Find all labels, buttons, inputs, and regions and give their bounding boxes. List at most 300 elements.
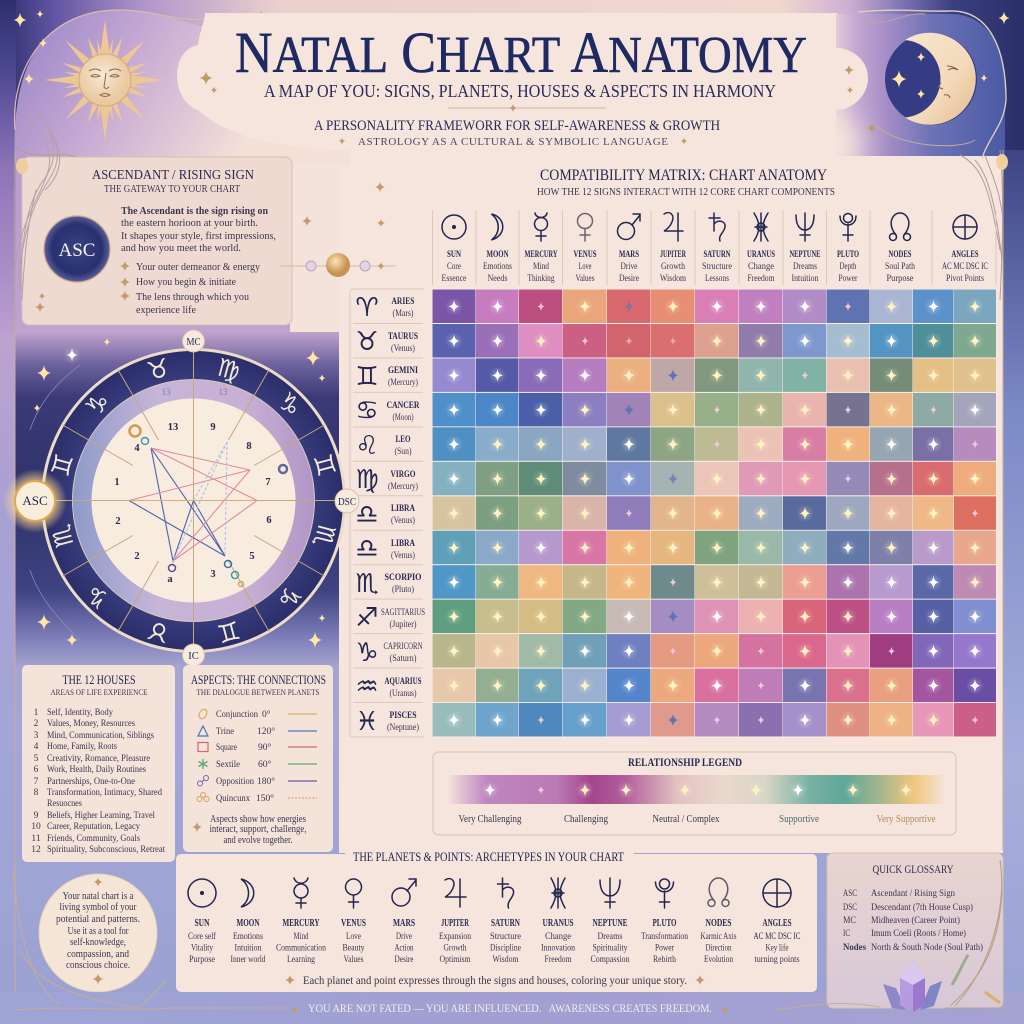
IC marker: IC	[188, 651, 199, 662]
ascendant bullet list: experience life	[136, 305, 196, 316]
houses list: Friends, Community, Goals	[47, 834, 140, 844]
zodiac glyphs: ♊︎	[308, 451, 341, 480]
sign names: (Venus)	[391, 550, 415, 561]
houses list: 8	[34, 788, 39, 798]
house numbers	[114, 422, 272, 585]
aspect: conjunction	[197, 708, 317, 720]
aspects note: Aspects show how energies	[210, 814, 306, 825]
glossary entries: MC	[843, 916, 856, 926]
glossary entries: North & South Node (Soul Path)	[871, 942, 983, 953]
matrix row: Libra second	[432, 531, 996, 564]
planet: saturn: Discipline	[490, 942, 521, 952]
house numbers: 13	[168, 422, 178, 433]
sign glyphs: ♎︎	[355, 534, 379, 564]
house numbers: 8	[246, 441, 252, 452]
aspect lines	[129, 442, 257, 561]
aspect: square: 90°	[258, 742, 272, 753]
planet: nodes: Direction	[706, 942, 732, 952]
column: neptune: Intuition	[792, 273, 819, 283]
ascendant bullet list: Your outer demeanor & energy	[136, 262, 261, 273]
aspect: opposition	[198, 776, 317, 787]
ascendant description: It shapes your style, first impressions,	[121, 231, 276, 242]
column: sun: Essence	[442, 273, 466, 283]
houses list: 6	[34, 765, 39, 775]
panel: aspects	[183, 665, 333, 852]
column: saturn: Structure	[702, 261, 732, 271]
houses list: Resuocnes	[47, 799, 82, 809]
house numbers: 9	[210, 422, 216, 433]
sign names: TAURUS	[388, 332, 418, 342]
matrix row: Pisces	[432, 703, 996, 736]
aspect: trine	[198, 726, 317, 737]
sign glyphs: ♉︎	[355, 327, 379, 357]
planet: venus: Love	[346, 931, 361, 941]
quote medallion: self-knowledge,	[70, 937, 126, 948]
planet: uranus: URANUS	[542, 918, 574, 929]
quote medallion	[39, 874, 157, 992]
planet: moon: Intuition	[234, 942, 262, 952]
ascendant description: The Ascendant is the sign rising on	[121, 206, 268, 217]
column: nodes: Purpose	[886, 273, 914, 283]
sign names: ARIES	[392, 297, 414, 307]
bottom-left vine	[13, 870, 880, 1010]
sign names: (Mercury)	[388, 377, 418, 388]
sun cartouche	[14, 10, 350, 165]
legend labels: Challenging	[564, 814, 608, 825]
house numbers: 3	[210, 569, 216, 580]
aspect: sextile: 60°	[258, 759, 272, 770]
ascendant heading: ASCENDANT / RISING SIGN	[92, 168, 254, 183]
zodiac glyphs: ♑︎	[79, 386, 116, 423]
planet: pluto	[641, 879, 688, 964]
sign names: (Neptune)	[387, 722, 419, 733]
sign names: (Saturn)	[390, 653, 416, 664]
column: neptune: Dreams	[793, 261, 817, 271]
planet: pluto: Transformation	[641, 931, 688, 941]
sign names: (Mercury)	[388, 481, 418, 492]
panel: ascendant	[22, 157, 292, 325]
planet: neptune	[590, 878, 630, 964]
matrix row: Aquarius	[432, 669, 996, 702]
column: neptune: NEPTUNE	[790, 250, 820, 260]
planet: venus: VENUS	[341, 918, 366, 929]
houses list: Career, Reputation, Legacy	[47, 822, 140, 832]
zodiac glyphs: ♍︎	[214, 353, 243, 386]
relationship legend	[433, 752, 956, 835]
matrix column headers	[432, 210, 996, 285]
planet: angles: turning points	[754, 954, 800, 964]
house numbers: 7	[265, 477, 271, 488]
planet: jupiter: Growth	[444, 942, 467, 952]
icon: amethyst crystal	[883, 960, 942, 1012]
wheel spokes	[55, 349, 342, 652]
column: nodes: Soul Path	[885, 261, 915, 271]
column: jupiter: Growth	[661, 261, 685, 271]
zodiac glyphs: ♏︎	[308, 521, 341, 550]
sign names: LEO	[396, 435, 410, 445]
quote medallion: potential and patterns.	[56, 914, 140, 925]
planet: jupiter	[439, 879, 471, 964]
legend gradient bar	[447, 775, 945, 804]
planet: uranus: Change	[545, 931, 571, 941]
sign names: (Pluto)	[392, 584, 414, 595]
aspect: sextile: Sextile	[216, 760, 240, 770]
column: mercury: MERCURY	[524, 250, 558, 260]
aspect: opposition: Opposition	[216, 777, 254, 787]
column: mars	[618, 214, 640, 283]
footer motto: YOU ARE NOT FATED — YOU ARE INFLUENCED. AWARENESS CREATES FREEDOM.	[308, 1001, 712, 1015]
column: jupiter: JUPITER	[660, 250, 686, 260]
sign glyphs: ♏︎	[355, 569, 379, 599]
column: saturn: Lessons	[705, 273, 729, 283]
quote medallion: Your natal chart is a	[62, 891, 134, 902]
column: mars: Drive	[620, 261, 638, 271]
panel: twelve houses	[22, 665, 175, 862]
ascendant bullet list: How you begin & initiate	[136, 277, 236, 288]
aspect: quincunx: 150°	[256, 793, 274, 804]
planet: mercury: Mind	[294, 931, 309, 941]
planet: pluto: Rebirth	[653, 954, 676, 964]
house numbers: 4	[134, 443, 140, 454]
column: venus: Love	[578, 261, 592, 271]
glossary entries: Nodes	[843, 943, 866, 953]
aspect: conjunction: 0°	[262, 709, 271, 720]
sign glyphs: ♊︎	[355, 362, 379, 392]
quote medallion: Use it as a tool for	[68, 926, 129, 937]
planet: sun: Purpose	[189, 954, 215, 964]
zodiac glyphs: ♊︎	[46, 451, 79, 480]
natal wheel	[3, 330, 359, 666]
matrix row: Scorpio	[432, 565, 996, 599]
ring degree marks: 13	[162, 387, 171, 397]
glossary entries: DSC	[843, 903, 857, 913]
houses list: Transformation, Intimacy, Shared	[47, 787, 162, 798]
matrix row: Leo	[432, 427, 996, 461]
sign names: (Jupiter)	[390, 619, 416, 630]
planet: pluto: PLUTO	[652, 918, 677, 929]
aspects note	[192, 814, 306, 846]
sign names: SAGITTARIUS	[381, 608, 425, 618]
planet: angles: AC MC DSC IC	[754, 931, 800, 941]
planet: neptune: Compassion	[590, 954, 630, 964]
houses list: 2	[34, 719, 39, 729]
matrix row: Libra	[432, 496, 996, 530]
wheel background stars	[30, 338, 326, 648]
houses list: 1	[34, 708, 39, 718]
planet: jupiter: Optimism	[440, 954, 470, 964]
planet: moon: Inner world	[230, 954, 266, 964]
planet: mercury: MERCURY	[282, 918, 320, 929]
planet: angles: Key life	[766, 942, 788, 952]
legend labels: Very Supportive	[876, 814, 936, 825]
DSC marker: DSC	[338, 497, 356, 508]
column: venus	[574, 214, 596, 283]
bottom-right vine	[945, 860, 1002, 1008]
column: nodes	[885, 213, 915, 283]
matrix row: Cancer	[432, 393, 996, 426]
glossary entries: Imum Coeli (Roots / Home)	[871, 928, 966, 939]
planet: moon: Emotions	[233, 931, 263, 941]
column: angles: AC MC DSC IC	[942, 261, 988, 271]
tagline: A PERSONALITY FRAMEWORR FOR SELF-AWARENESS & GROWTH	[314, 118, 720, 134]
planet: mars	[392, 879, 416, 964]
planet: sun	[188, 879, 216, 964]
planet: sun: SUN	[194, 918, 210, 929]
planet: nodes: NODES	[706, 918, 732, 929]
zodiac glyphs: ♑︎	[79, 578, 116, 615]
houses list	[31, 707, 165, 855]
ascendant description: and how you meet the world.	[121, 243, 241, 254]
planet: neptune: Spirituality	[592, 942, 628, 952]
sign glyphs: ♐︎	[355, 603, 379, 633]
panel: planets and points	[176, 845, 817, 992]
sign names: (Venus)	[391, 515, 415, 526]
planet: sun: Core self	[188, 931, 216, 941]
houses list: Values, Money, Resources	[47, 719, 135, 729]
zodiac glyphs: ♉︎	[144, 615, 173, 648]
aspect: square	[198, 742, 317, 753]
header panel	[177, 13, 838, 150]
legend labels	[458, 814, 936, 825]
cultural note: ASTROLOGY AS A CULTURAL & SYMBOLIC LANGUAGE	[358, 136, 668, 148]
sign names: LIBRA	[391, 504, 415, 514]
sign names: LIBRA	[391, 539, 415, 549]
house numbers: a	[167, 574, 173, 585]
house numbers: 1	[114, 477, 120, 488]
house numbers: 6	[266, 515, 272, 526]
subtitle: A MAP OF YOU: SIGNS, PLANETS, HOUSES & ASPECTS IN HARMONY	[264, 81, 776, 101]
planet: neptune: NEPTUNE	[592, 918, 628, 929]
ascendant bullet list	[120, 261, 261, 316]
sign names: (Moon)	[392, 412, 414, 423]
sign names	[381, 297, 425, 733]
column: moon: Emotions	[483, 261, 512, 271]
title: NATAL CHART ANATOMY	[235, 20, 807, 85]
zodiac glyphs: ♉︎	[144, 353, 173, 386]
planet: jupiter: JUPITER	[441, 918, 470, 929]
sign glyphs: ♎︎	[355, 500, 379, 530]
planet: angles	[754, 879, 800, 964]
column: mars: Desire	[619, 273, 639, 283]
aspects heading: ASPECTS: THE CONNECTIONS	[191, 673, 326, 687]
column: sun: Core	[447, 261, 461, 271]
moon cartouche	[738, 10, 1010, 187]
houses list: Partnerships, One-to-One	[47, 777, 135, 787]
sign names: SCORPIO	[384, 573, 422, 583]
column: sun: SUN	[447, 250, 461, 260]
sign glyphs: ♋︎	[355, 396, 379, 426]
matrix row: Taurus	[432, 324, 996, 358]
quote medallion: conscious choice.	[66, 960, 130, 971]
planet: moon	[230, 879, 266, 964]
column: saturn: SATURN	[704, 250, 731, 260]
column: moon: Needs	[488, 273, 508, 283]
planet: jupiter: Expansion	[439, 931, 471, 941]
column: sun	[442, 215, 466, 283]
column: uranus: URANUS	[747, 250, 775, 260]
houses list: Creativity, Romance, Pleasure	[47, 754, 150, 764]
IC marker	[182, 644, 204, 666]
column: angles: ANGLES	[952, 250, 978, 260]
sign glyphs: ♒︎	[355, 672, 379, 702]
sign names: (Sun)	[394, 446, 412, 457]
glossary entries: Midheaven (Career Point)	[871, 915, 960, 926]
planet: uranus	[541, 878, 575, 964]
planet: mercury: Communication	[276, 942, 326, 952]
glossary entries: IC	[843, 929, 850, 939]
icon: ASC badge	[44, 216, 110, 282]
aspect: trine: 120°	[257, 726, 275, 737]
aspect: quincunx	[197, 792, 317, 804]
sign names: (Mars)	[392, 308, 414, 319]
quote medallion: compassion, and	[67, 949, 130, 960]
sign names: CAPRICORN	[384, 642, 423, 652]
legend labels: Supportive	[779, 814, 820, 825]
column: jupiter	[660, 213, 686, 283]
sign names: GEMINI	[388, 366, 418, 376]
house numbers: 5	[249, 551, 255, 562]
houses list: 10	[31, 822, 41, 832]
glossary entries: Ascendant / Rising Sign	[871, 889, 955, 899]
icon: smiling sun	[45, 20, 165, 140]
zodiac glyphs: ♊︎	[214, 615, 243, 648]
aspect: sextile	[198, 759, 317, 770]
footer band	[0, 992, 1024, 1024]
column: neptune	[790, 213, 820, 283]
house numbers: 2	[134, 551, 140, 562]
panel: quick glossary	[827, 853, 1003, 1008]
houses list: 3	[34, 731, 39, 741]
icon: ASC badge: ASC	[59, 240, 95, 261]
zodiac glyphs: ♑︎	[271, 386, 308, 423]
planet: sun: Vitality	[191, 942, 213, 952]
ring degree marks: 13	[218, 387, 228, 397]
glossary title: QUICK GLOSSARY	[872, 862, 954, 876]
ascendant bullet list: The lens through which you	[136, 292, 250, 303]
glossary entries: ASC	[843, 889, 857, 899]
column: pluto: Depth	[840, 261, 857, 271]
houses list: Mind, Communication, Siblings	[47, 731, 154, 741]
compatibility matrix heading: COMPATIBILITY MATRIX: CHART ANATOMY	[540, 167, 827, 184]
planet: mars: Action	[394, 942, 414, 952]
column: moon	[483, 214, 512, 283]
matrix sign labels	[350, 289, 425, 737]
matrix row: Virgo	[432, 462, 996, 495]
column: angles: Pivot Points	[946, 273, 984, 283]
column: pluto: PLUTO	[837, 250, 859, 260]
house numbers: 2	[115, 516, 121, 527]
sign glyphs: ♓︎	[355, 707, 379, 737]
houses list: 11	[31, 834, 41, 844]
matrix row: Capricorn	[432, 634, 996, 668]
compatibility matrix subheading: HOW THE 12 SIGNS INTERACT WITH 12 CORE CHART COMPONENTS	[537, 186, 835, 198]
planet: neptune: Dreams	[598, 931, 623, 941]
aspect: square: Square	[216, 743, 237, 753]
ASC marker: ASC	[22, 493, 48, 508]
MC marker	[182, 330, 204, 352]
MC marker: MC	[186, 337, 200, 348]
planet: saturn	[490, 878, 521, 964]
column: angles	[942, 215, 988, 283]
zodiac band	[42, 350, 344, 652]
sign glyphs: ♍︎	[355, 465, 379, 495]
houses list: 4	[34, 742, 39, 752]
planet: nodes: Evolution	[704, 954, 733, 964]
houses list: Home, Family, Roots	[47, 742, 117, 752]
column: mercury: Thinking	[528, 273, 555, 283]
column: mercury	[524, 213, 558, 283]
aspect: conjunction: Conjunction	[216, 710, 258, 720]
column: mars: MARS	[619, 250, 639, 260]
planet: uranus: Innovation	[541, 942, 575, 952]
sign names: AQUARIUS	[384, 677, 422, 687]
planets heading: THE PLANETS & POINTS: ARCHETYPES IN YOUR CHART	[353, 849, 624, 864]
sign names: (Uranus)	[390, 688, 416, 699]
houses list: Beliefs, Higher Learning, Travel	[47, 810, 155, 821]
column: uranus: Freedom	[748, 273, 774, 283]
houses subheading: AREAS OF LIFE EXPERIENCE	[50, 687, 148, 697]
matrix row: Sagittarius	[432, 600, 996, 633]
houses list: Spirituality, Subconscious, Retreat	[47, 845, 165, 855]
zodiac glyphs	[46, 353, 341, 648]
house ring	[72, 380, 314, 622]
ASC marker	[3, 469, 67, 533]
sign glyphs	[355, 293, 379, 737]
column: mercury: Mind	[533, 261, 549, 271]
connector: ascendant to matrix	[280, 182, 396, 277]
planet: mars: Drive	[396, 931, 412, 941]
column: moon: MOON	[486, 250, 509, 260]
aspects note: and evolve together.	[224, 835, 292, 846]
houses list: 5	[34, 754, 39, 764]
sign names: CANCER	[386, 401, 420, 411]
column: saturn	[702, 213, 732, 283]
planet: venus	[341, 879, 366, 964]
glossary entries: Descendant (7th House Cusp)	[871, 902, 973, 913]
aspect: trine: Trine	[216, 727, 234, 737]
sign names: (Venus)	[391, 343, 415, 354]
planet: mars: Desire	[394, 954, 414, 964]
legend title: RELATIONSHIP LEGEND	[628, 757, 742, 769]
planet: uranus: Freedom	[544, 954, 572, 964]
houses list: 9	[34, 811, 39, 821]
planet: pluto: Power	[655, 942, 674, 952]
DSC marker	[335, 489, 359, 513]
planet: angles: ANGLES	[762, 918, 792, 929]
planet: saturn: Structure	[490, 931, 521, 941]
sign glyphs: ♈︎	[355, 293, 379, 323]
ascendant description: the eastern horioon at your birth.	[121, 218, 258, 229]
sign glyphs: ♑︎	[355, 638, 379, 668]
right vine by matrix	[960, 150, 1008, 300]
matrix row: Gemini	[432, 358, 996, 392]
glossary entries	[843, 889, 983, 953]
sign names: VIRGO	[390, 470, 416, 480]
column: nodes: NODES	[888, 250, 912, 260]
column: pluto	[837, 214, 859, 283]
aspects subheading: THE DIALOGUE BETWEEN PLANETS	[196, 687, 320, 697]
planet: mercury: Learning	[287, 954, 315, 964]
ascendant description	[121, 206, 276, 254]
planet: venus: Values	[344, 954, 364, 964]
legend labels: Neutral / Complex	[652, 814, 720, 825]
houses list: 12	[31, 845, 41, 855]
ring degree marks	[162, 387, 228, 397]
planet: saturn: SATURN	[491, 918, 521, 929]
planet: mercury	[276, 878, 326, 964]
planets footnote: Each planet and point expresses through the signs and houses, coloring your unique story.	[303, 973, 687, 987]
column: venus: Values	[576, 273, 595, 283]
